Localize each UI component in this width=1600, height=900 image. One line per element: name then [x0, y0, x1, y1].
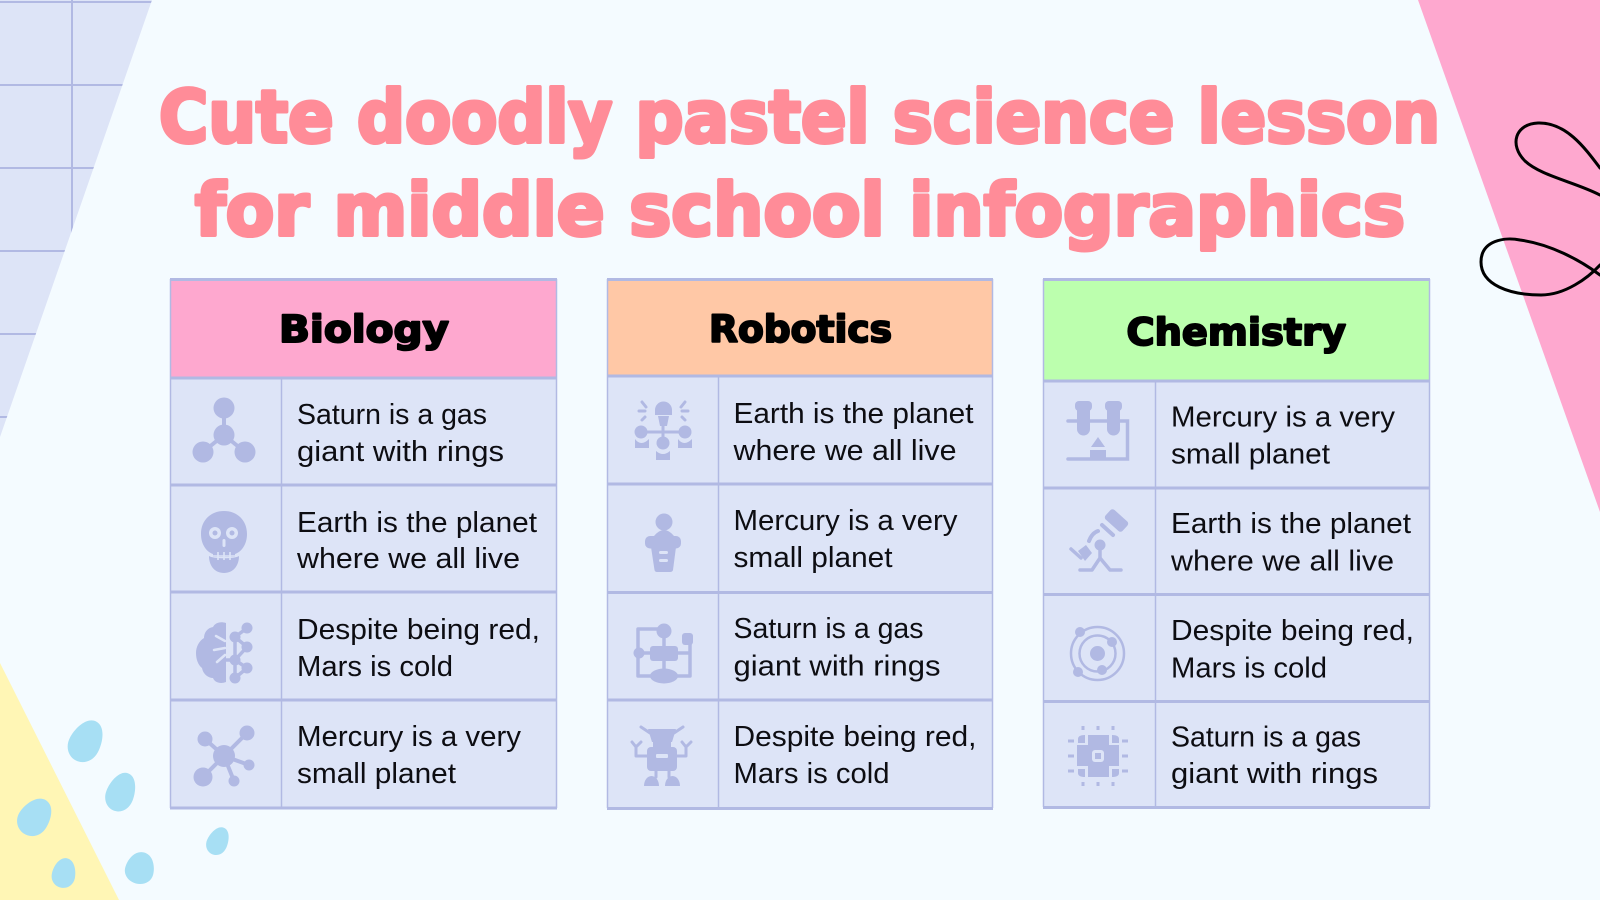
- row text: Despite: Despite being red,: [297, 614, 540, 646]
- heading: Robotics: Robotics: [709, 308, 892, 351]
- row text: Saturn: giant with rings: [1171, 758, 1378, 790]
- icon: skull: [201, 511, 247, 573]
- row text: Despite: Mars is cold: [734, 758, 890, 790]
- panel: Chemistry: [1043, 279, 1430, 808]
- row text: Saturn: Saturn is a gas: [734, 613, 924, 645]
- row text: Despite: Mars is cold: [1171, 652, 1327, 684]
- row text: Despite: Mars is cold: [297, 651, 453, 683]
- icon: molecule: [192, 398, 256, 462]
- row text: Mercury: [1171, 402, 1395, 470]
- row text: Mercury: [297, 721, 521, 790]
- icon: network hub: [194, 726, 254, 786]
- icon: speaker at podium: [645, 514, 681, 572]
- title: for middle school infographics: [195, 168, 1405, 252]
- row text: Despite: [1171, 615, 1414, 684]
- panel: Robotics: [607, 279, 993, 808]
- title: Cute doodly pastel science lesson: [159, 75, 1440, 159]
- row text: Earth: [1170, 508, 1411, 578]
- row text: Saturn: Saturn is a gas: [1171, 722, 1361, 754]
- row text: Mercury: small planet: [297, 758, 456, 790]
- row text: Earth: [296, 507, 537, 575]
- icon: robot: [632, 727, 691, 786]
- icon: microchip: [1068, 726, 1128, 786]
- background shape: yellow wedge: [0, 663, 119, 900]
- decoration: blue blobs: [11, 714, 234, 890]
- icon: idea network: [634, 402, 692, 460]
- row text: Saturn: giant with rings: [734, 650, 940, 682]
- row text: Mercury: small planet: [734, 542, 892, 574]
- panel: Biology: [170, 279, 557, 808]
- row text: Despite: Despite being red,: [1171, 615, 1414, 647]
- row text: Earth: [732, 398, 974, 467]
- icon: telescope: [1071, 508, 1129, 570]
- row text: Saturn: [297, 399, 504, 468]
- row text: Mercury: Mercury is a very: [1171, 402, 1395, 434]
- icon: atom: [1071, 627, 1124, 680]
- row text: Saturn: Saturn is a gas: [297, 399, 487, 431]
- heading: Chemistry: Chemistry: [1126, 311, 1346, 354]
- icon: flowchart: [634, 624, 693, 684]
- row text: Despite: Despite being red,: [734, 721, 976, 753]
- decoration: black doodle loops: [1481, 123, 1600, 295]
- title: [159, 75, 1440, 252]
- row text: Earth: where we all live: [1170, 546, 1394, 578]
- row text: Earth: where we all live: [732, 435, 956, 467]
- row text: Mercury: Mercury is a very: [297, 721, 521, 753]
- row text: Earth: Earth is the planet: [1171, 508, 1411, 540]
- icon: test tubes: [1068, 401, 1128, 459]
- row text: Saturn: [1171, 722, 1378, 790]
- background shape: grid paper: [0, 0, 152, 437]
- row text: Earth: Earth is the planet: [734, 398, 974, 430]
- row text: Mercury: Mercury is a very: [734, 505, 958, 537]
- background shape: pink wedge: [1418, 0, 1600, 512]
- row text: Earth: Earth is the planet: [297, 507, 537, 539]
- icon: brain network: [196, 622, 252, 684]
- row text: Mercury: [734, 505, 958, 574]
- heading: Biology: Biology: [279, 308, 449, 351]
- row text: Despite: [734, 721, 976, 790]
- row text: Earth: where we all live: [296, 543, 520, 575]
- row text: Saturn: giant with rings: [297, 436, 504, 468]
- row text: Saturn: [734, 613, 940, 682]
- row text: Mercury: small planet: [1171, 438, 1330, 470]
- row text: Despite: [297, 614, 540, 683]
